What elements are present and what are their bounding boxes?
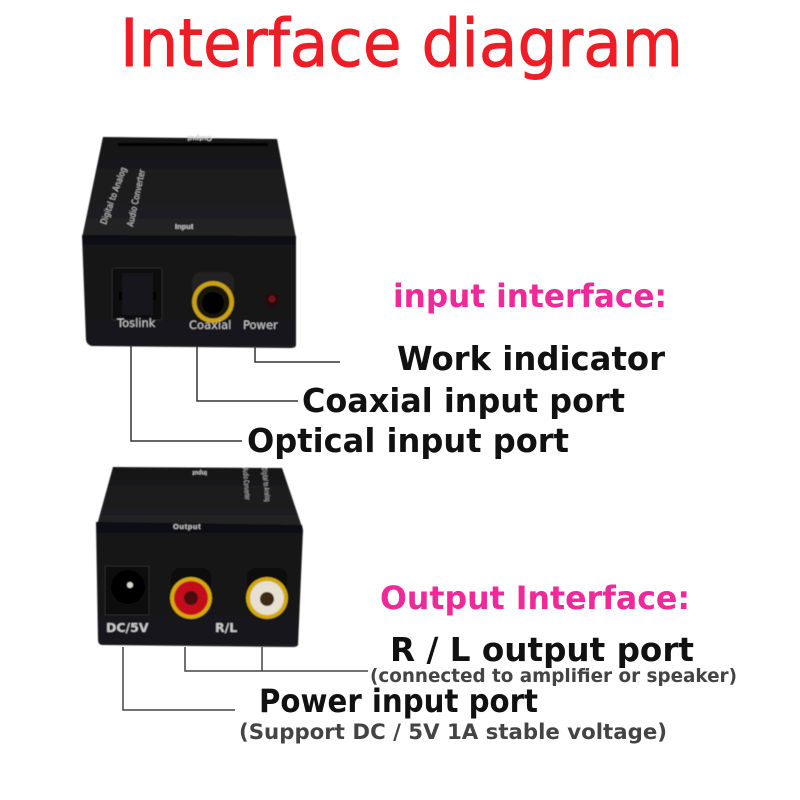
- power indicator led: [265, 293, 279, 307]
- coaxial port: [192, 272, 234, 323]
- printed product name: [99, 166, 148, 228]
- port captions: DC/5V: [106, 620, 149, 635]
- device top face: [97, 467, 302, 527]
- red rca port: [170, 568, 212, 619]
- port captions: [106, 620, 237, 635]
- label: power input port: Power input port: [259, 682, 538, 720]
- port captions: Power: [243, 318, 278, 332]
- leader line: coaxial input port: [197, 346, 298, 401]
- leader line: work indicator: [255, 346, 340, 362]
- printed product name: Digital to Analog: [260, 467, 272, 502]
- printed product name: Audio Converter: [126, 169, 148, 228]
- port captions: Coaxial: [189, 318, 231, 332]
- device front face: [82, 235, 296, 348]
- device: output side converter: [96, 467, 303, 647]
- output label: Output: [173, 522, 201, 531]
- note: amplifier or speaker: (connected to amplifier or speaker): [370, 665, 737, 687]
- input label: Input: [192, 469, 207, 475]
- port captions: [116, 316, 278, 332]
- label: optical input port: Optical input port: [247, 421, 569, 460]
- port captions: Toslink: [116, 316, 156, 330]
- note: supported voltage: (Support DC / 5V 1A stable voltage): [239, 720, 667, 744]
- leader line: optical input port: [131, 346, 242, 441]
- device: input side converter: [82, 134, 296, 348]
- dc power jack: [105, 566, 149, 615]
- leader line: power input port: [123, 647, 235, 710]
- input label: Input: [175, 222, 194, 231]
- device front face: [96, 522, 303, 647]
- label: input interface: input interface:: [393, 277, 667, 315]
- leader line: r/l output port: [185, 647, 368, 671]
- title: Interface diagram: [120, 5, 683, 82]
- toslink optical port: [112, 268, 162, 320]
- upside-down output label: Output: [187, 134, 212, 143]
- label: coaxial input port: Coaxial input port: [302, 381, 625, 420]
- printed product name: Audio Converter: [241, 468, 251, 500]
- label: output interface: Output Interface:: [380, 579, 690, 617]
- white rca port: [246, 568, 288, 619]
- printed product name: [241, 467, 272, 502]
- printed product name: Digital to Analog: [99, 166, 129, 226]
- port captions: R/L: [215, 620, 237, 635]
- device top face: [82, 137, 296, 238]
- label: r/l output port: R / L output port: [390, 630, 694, 669]
- label: work indicator: Work indicator: [397, 339, 666, 378]
